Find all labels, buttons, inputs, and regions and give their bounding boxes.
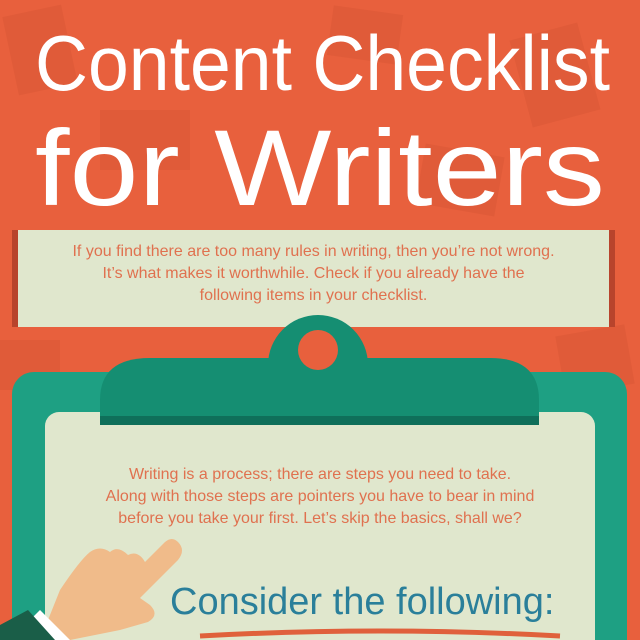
paragraph: Along with those steps are pointers you have to bear in mind: [106, 488, 534, 505]
intro box: [12, 230, 615, 327]
paragraph: [106, 466, 534, 527]
intro box: following items in your checklist.: [200, 287, 427, 304]
intro box: It’s what makes it worthwhile. Check if you already have the: [102, 265, 525, 282]
clipboard: [12, 372, 627, 640]
clip: [100, 315, 539, 425]
title: Content Checklist: [35, 19, 610, 107]
heading: consider the following: Consider the following:: [170, 581, 554, 623]
paragraph: before you take your first. Let’s skip the basics, shall we?: [118, 510, 522, 527]
brush underline: [200, 628, 560, 638]
icon: pointing hand: [0, 539, 182, 640]
paper: [45, 412, 595, 640]
intro box: If you find there are too many rules in writing, then you’re not wrong.: [72, 243, 555, 260]
paragraph: Writing is a process; there are steps you need to take.: [129, 466, 511, 483]
title: [35, 19, 610, 225]
title: for Writers: [35, 107, 605, 225]
